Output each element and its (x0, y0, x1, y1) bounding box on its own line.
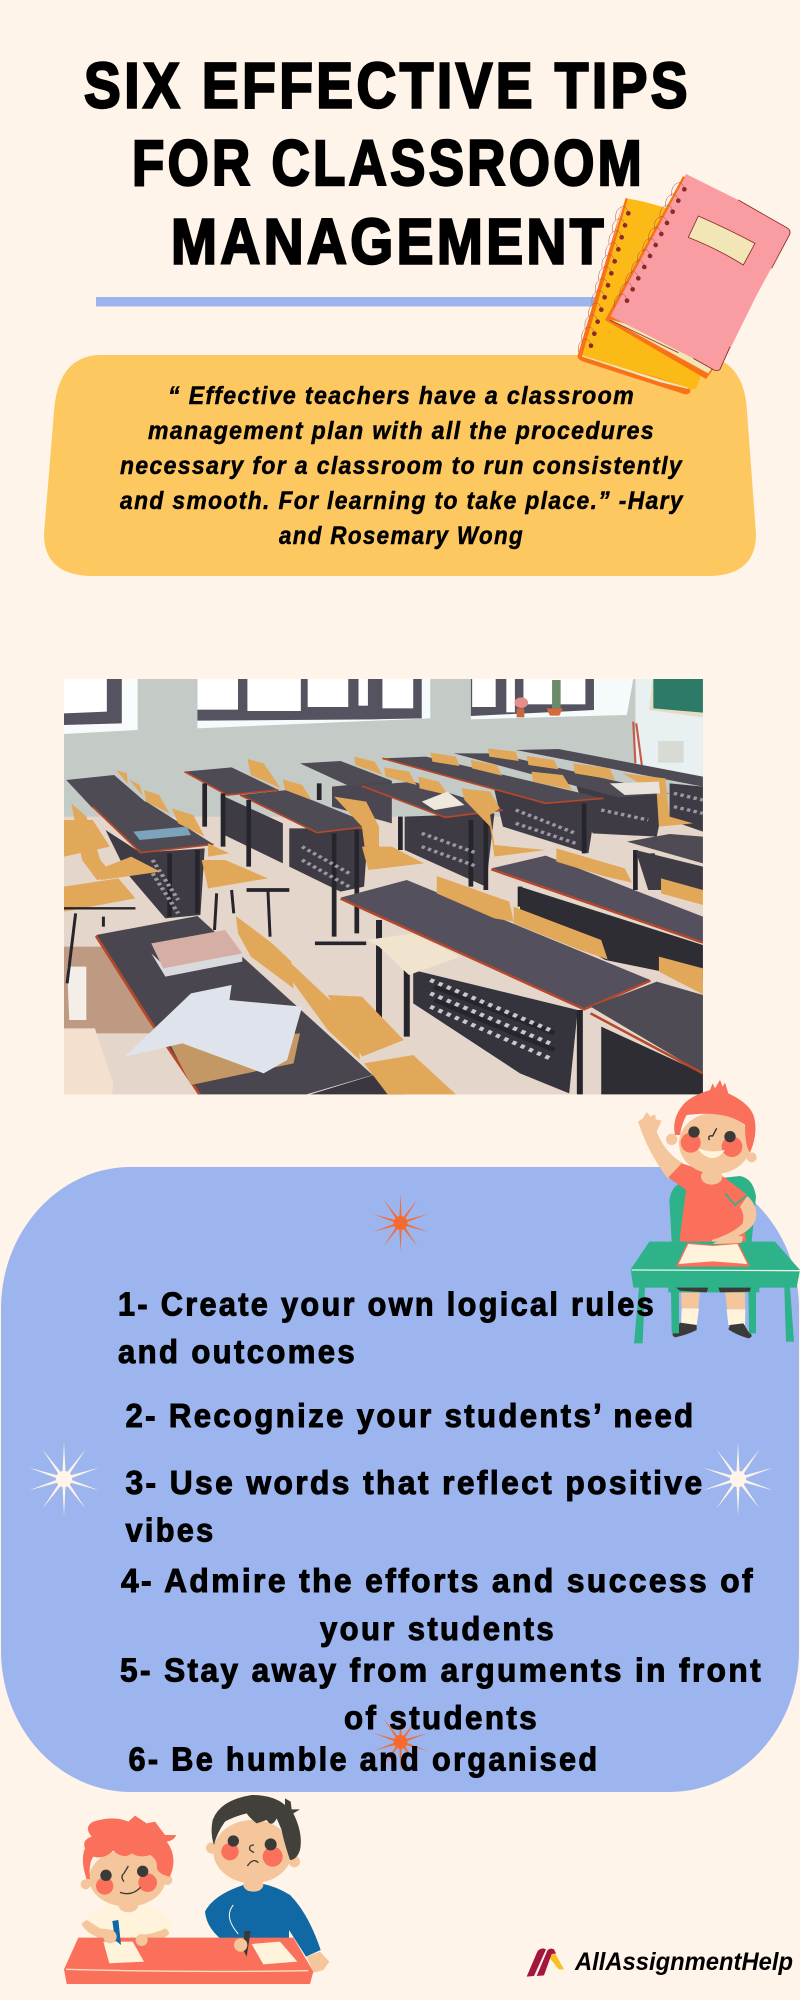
boy (638, 1080, 757, 1338)
red-haired kid (81, 1816, 176, 1946)
illustration: two kids at desk (64, 1795, 329, 1984)
panel: tips (1, 1080, 800, 1792)
quote text: “ Effective teachers have a classroom (168, 382, 635, 410)
tip 3: vibes (126, 1512, 216, 1548)
tip 5: of students (344, 1699, 539, 1736)
icon: notebooks (577, 174, 790, 394)
tip 4: your students (320, 1610, 556, 1647)
icon: white star left (29, 1442, 99, 1516)
tip 5 (120, 1652, 763, 1736)
title: MANAGEMENT (171, 206, 607, 278)
logo mark (527, 1948, 564, 1977)
title: FOR CLASSROOM (132, 127, 645, 199)
quote text: management plan with all the procedures (148, 417, 655, 445)
quote text: and Rosemary Wong (279, 522, 524, 550)
near desks (64, 834, 703, 1094)
tip 1: 1- Create your own logical rules (118, 1286, 656, 1322)
tip 3: 3- Use words that reflect positive (126, 1464, 704, 1501)
yellow notebook (577, 198, 702, 394)
quote text (120, 382, 684, 550)
books (125, 782, 660, 1085)
tip 4 (121, 1562, 755, 1647)
tip 2: 2- Recognize your students’ need (126, 1397, 696, 1434)
tip 1 (118, 1286, 656, 1370)
tip 3 (126, 1464, 704, 1548)
wall and floor (64, 679, 703, 1094)
icon: orange star bottom (373, 1713, 428, 1771)
far desks (66, 749, 703, 943)
near chairs (64, 848, 703, 1094)
photo: classroom (64, 679, 703, 1094)
illustration: boy raising hand at desk (631, 1080, 800, 1343)
red desk (64, 1920, 329, 1984)
title (84, 50, 691, 278)
tips panel shape (1, 1167, 799, 1792)
chair (669, 1176, 756, 1242)
tip 6: 6- Be humble and organised (128, 1740, 600, 1778)
pink notebook (605, 174, 790, 379)
title underline bar (96, 297, 596, 306)
tip 1: and outcomes (118, 1333, 357, 1370)
quote text: and smooth. For learning to take place.” -Hary (120, 487, 684, 515)
tip 5: 5- Stay away from arguments in front (120, 1652, 763, 1688)
dark-haired kid (205, 1795, 321, 1957)
chairs (64, 748, 693, 912)
quote panel shape (44, 355, 756, 576)
logo text: AllAssignmentHelp (574, 1948, 793, 1976)
windows (64, 679, 703, 765)
desk (631, 1242, 800, 1343)
panel: quote (44, 355, 756, 576)
icon: orange star top (373, 1194, 428, 1252)
open book (676, 1236, 750, 1267)
tip 4: 4- Admire the efforts and success of (121, 1562, 755, 1599)
quote text: necessary for a classroom to run consistently (120, 452, 683, 480)
tips list (118, 1286, 763, 1778)
logo: AllAssignmentHelp (527, 1948, 793, 1977)
icon: white star right (703, 1442, 773, 1516)
title: SIX EFFECTIVE TIPS (84, 50, 691, 122)
